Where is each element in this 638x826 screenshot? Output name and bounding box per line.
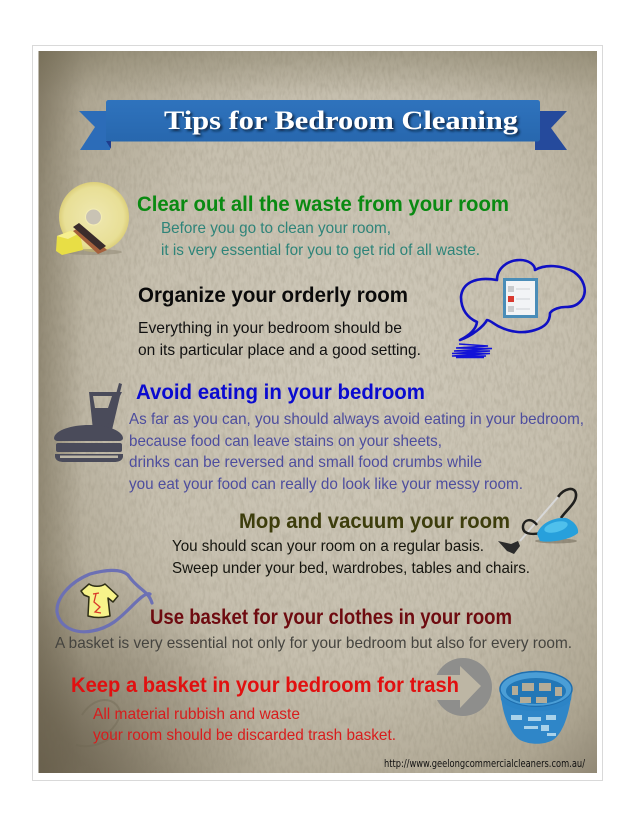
body text bbox=[129, 411, 584, 493]
icon: t-shirt with oval outline bbox=[57, 570, 152, 632]
body text bbox=[161, 220, 480, 259]
textured paper background bbox=[38, 51, 597, 773]
scribble bbox=[452, 344, 492, 358]
body text: because food can leave stains on your sheets, bbox=[129, 433, 442, 450]
section: basket for clothes bbox=[55, 606, 572, 652]
body text bbox=[172, 538, 530, 577]
icon: speech bubble with clipboard bbox=[452, 260, 585, 358]
heading: Avoid eating in your bedroom bbox=[136, 381, 425, 404]
body text: Sweep under your bed, wardrobes, tables and chairs. bbox=[172, 560, 530, 577]
icon: yellow disc with sponge and brush bbox=[56, 182, 129, 255]
banner right ribbon tail bbox=[535, 111, 567, 150]
section: avoid eating bbox=[129, 381, 584, 493]
page frame bbox=[32, 46, 602, 780]
clipboard bbox=[503, 278, 538, 318]
body text: you eat your food can really do look like your messy room. bbox=[129, 476, 523, 493]
title banner bbox=[79, 100, 567, 150]
body text: Before you go to clean your room, bbox=[161, 220, 391, 237]
icon: vacuum cleaner bbox=[498, 489, 578, 554]
body text: it is very essential for you to get rid of all waste. bbox=[161, 242, 480, 259]
body text: drinks can be reversed and small food crumbs while bbox=[129, 454, 482, 471]
body text bbox=[138, 320, 421, 359]
body text: You should scan your room on a regular basis. bbox=[172, 538, 484, 555]
body text bbox=[93, 706, 396, 744]
section: clear out waste bbox=[137, 193, 509, 259]
icon: blue laundry basket bbox=[500, 672, 572, 744]
heading: Organize your orderly room bbox=[138, 284, 408, 307]
section: mop and vacuum bbox=[172, 510, 530, 577]
title: Tips for Bedroom Cleaning bbox=[164, 106, 518, 135]
body text: As far as you can, you should always avoid eating in your bedroom, bbox=[129, 411, 584, 428]
body text: Everything in your bedroom should be bbox=[138, 320, 402, 337]
icon: burger and drink bbox=[54, 383, 123, 462]
heading: Keep a basket in your bedroom for trash bbox=[71, 674, 459, 697]
body text: A basket is very essential not only for your bedroom but also for every room. bbox=[55, 635, 572, 652]
body text: All material rubbish and waste bbox=[93, 706, 300, 723]
website url: http://www.geelongcommercialcleaners.com.au/ bbox=[384, 758, 585, 770]
heading: Mop and vacuum your room bbox=[239, 510, 510, 533]
body text: your room should be discarded trash basket. bbox=[93, 727, 396, 744]
body text: on its particular place and a good setting. bbox=[138, 342, 421, 359]
banner left ribbon tail bbox=[79, 111, 110, 150]
banner main band bbox=[106, 100, 540, 142]
banner fold left bbox=[106, 141, 111, 149]
section: organize room bbox=[138, 284, 421, 359]
t-shirt bbox=[81, 584, 118, 618]
heading: Use basket for your clothes in your room bbox=[150, 606, 512, 629]
bubble outline bbox=[460, 260, 585, 340]
heading: Clear out all the waste from your room bbox=[137, 193, 509, 216]
hand-drawn oval bbox=[57, 570, 152, 632]
section: basket for trash bbox=[71, 674, 459, 744]
icon: grey circular arrow bbox=[432, 658, 492, 716]
